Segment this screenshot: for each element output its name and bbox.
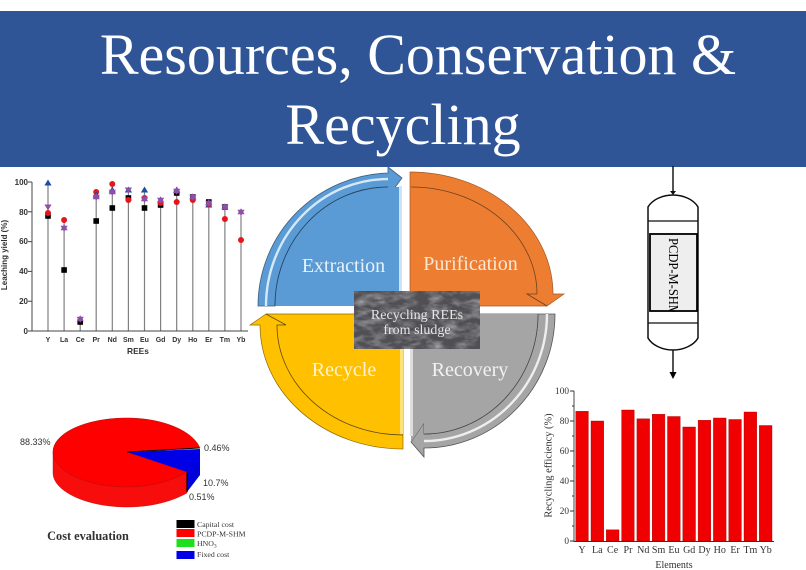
legend: PCDP-M-SHM [197, 530, 246, 538]
x tick labels: Sm [652, 545, 665, 556]
quadrant: extraction [258, 167, 402, 306]
y tick labels: 20 [19, 297, 29, 306]
blue wedge [127, 449, 200, 472]
x tick labels: La [592, 545, 603, 556]
x tick labels: Er [205, 337, 213, 344]
quadrant: purification [410, 172, 564, 306]
title banner: Resources, Conservation & [100, 22, 736, 87]
x tick labels: Y [46, 337, 51, 344]
x tick labels: Yb [760, 545, 772, 556]
column diagram: PCDP-M-SHM [648, 166, 698, 379]
packed bed: PCDP-M-SHM [666, 238, 681, 316]
x tick labels: Sm [123, 337, 134, 344]
x tick labels: Tm [743, 545, 758, 556]
x tick labels [46, 337, 245, 344]
pie chart: cost evaluation [20, 418, 246, 559]
y tick labels: 20 [560, 507, 569, 517]
x tick labels: La [60, 337, 68, 344]
y axis title: Recycling efficiency (%) [544, 413, 554, 518]
x tick labels: Pr [624, 545, 633, 556]
value labels: 0.51% [189, 492, 215, 502]
x tick labels: Ho [188, 337, 197, 344]
x tick labels: Dy [698, 545, 711, 556]
y tick labels: 80 [560, 417, 569, 427]
y axis title: Leaching yield (%) [0, 220, 9, 290]
y tick labels: 40 [19, 267, 29, 276]
y tick labels: 100 [555, 387, 569, 397]
axes [570, 391, 774, 542]
x tick labels: Yb [237, 337, 245, 344]
x axis title: REEs [127, 346, 149, 356]
y tick labels [15, 178, 29, 336]
centre box: recycling REEs from sludge: from sludge [383, 323, 451, 338]
bars [576, 410, 772, 541]
pie top [53, 418, 200, 487]
x tick labels [578, 545, 772, 556]
x tick labels: Dy [172, 337, 181, 344]
x tick labels: Ho [714, 545, 726, 556]
inlet arrow [672, 166, 674, 192]
legend: Fixed cost [197, 550, 230, 559]
y tick labels: 80 [19, 208, 29, 217]
pie side [53, 452, 187, 507]
blue side [187, 448, 200, 492]
chart: leaching yield of REEs [0, 178, 248, 356]
legend: Capital cost [197, 520, 235, 529]
process cycle diagram [250, 167, 564, 457]
title banner: Recycling [285, 92, 521, 157]
quadrant: recycle: Recycle [312, 359, 376, 381]
x tick labels: Gd [156, 337, 165, 344]
x tick labels: Y [578, 545, 586, 556]
vessel [648, 195, 698, 350]
y tick labels [555, 387, 569, 547]
axes [28, 182, 248, 331]
markers [45, 213, 51, 219]
quadrant: recovery: Recovery [432, 359, 508, 381]
value labels: 88.33% [20, 437, 51, 447]
x tick labels: Eu [668, 545, 679, 556]
x tick labels: Er [730, 545, 740, 556]
stems [48, 182, 241, 331]
centre box: recycling REEs from sludge [354, 291, 480, 349]
value labels: 10.7% [203, 478, 229, 488]
y tick labels: 0 [24, 327, 29, 336]
legend [176, 520, 246, 559]
x tick labels: Eu [140, 337, 149, 344]
x tick labels: Ce [607, 545, 619, 556]
x tick labels: Pr [92, 337, 100, 344]
quadrant: purification: Purification [423, 253, 518, 275]
x tick labels: Nd [108, 337, 117, 344]
y tick labels: 0 [564, 537, 569, 547]
y tick labels: 60 [19, 237, 29, 246]
x tick labels: Gd [683, 545, 695, 556]
x tick labels: Nd [637, 545, 649, 556]
title banner [0, 11, 806, 167]
outlet arrow [672, 350, 674, 374]
y tick labels: 40 [560, 477, 569, 487]
quadrant: extraction: Extraction [302, 255, 385, 277]
legend: HNO [197, 539, 214, 548]
value labels [20, 437, 230, 502]
quadrant: recovery [410, 314, 555, 457]
bar chart: recycling efficiency [544, 387, 774, 570]
pie title: Cost evaluation [47, 529, 129, 543]
legend: 3 [214, 544, 217, 550]
packed bed [650, 234, 697, 322]
centre box: recycling REEs from sludge: Recycling REEs [371, 308, 463, 323]
quadrant: recycle [250, 314, 403, 449]
x tick labels: Tm [220, 337, 230, 344]
value labels: 0.46% [204, 443, 230, 453]
y tick labels: 60 [560, 447, 569, 457]
x tick labels: Ce [76, 337, 85, 344]
y tick labels: 100 [15, 178, 29, 187]
